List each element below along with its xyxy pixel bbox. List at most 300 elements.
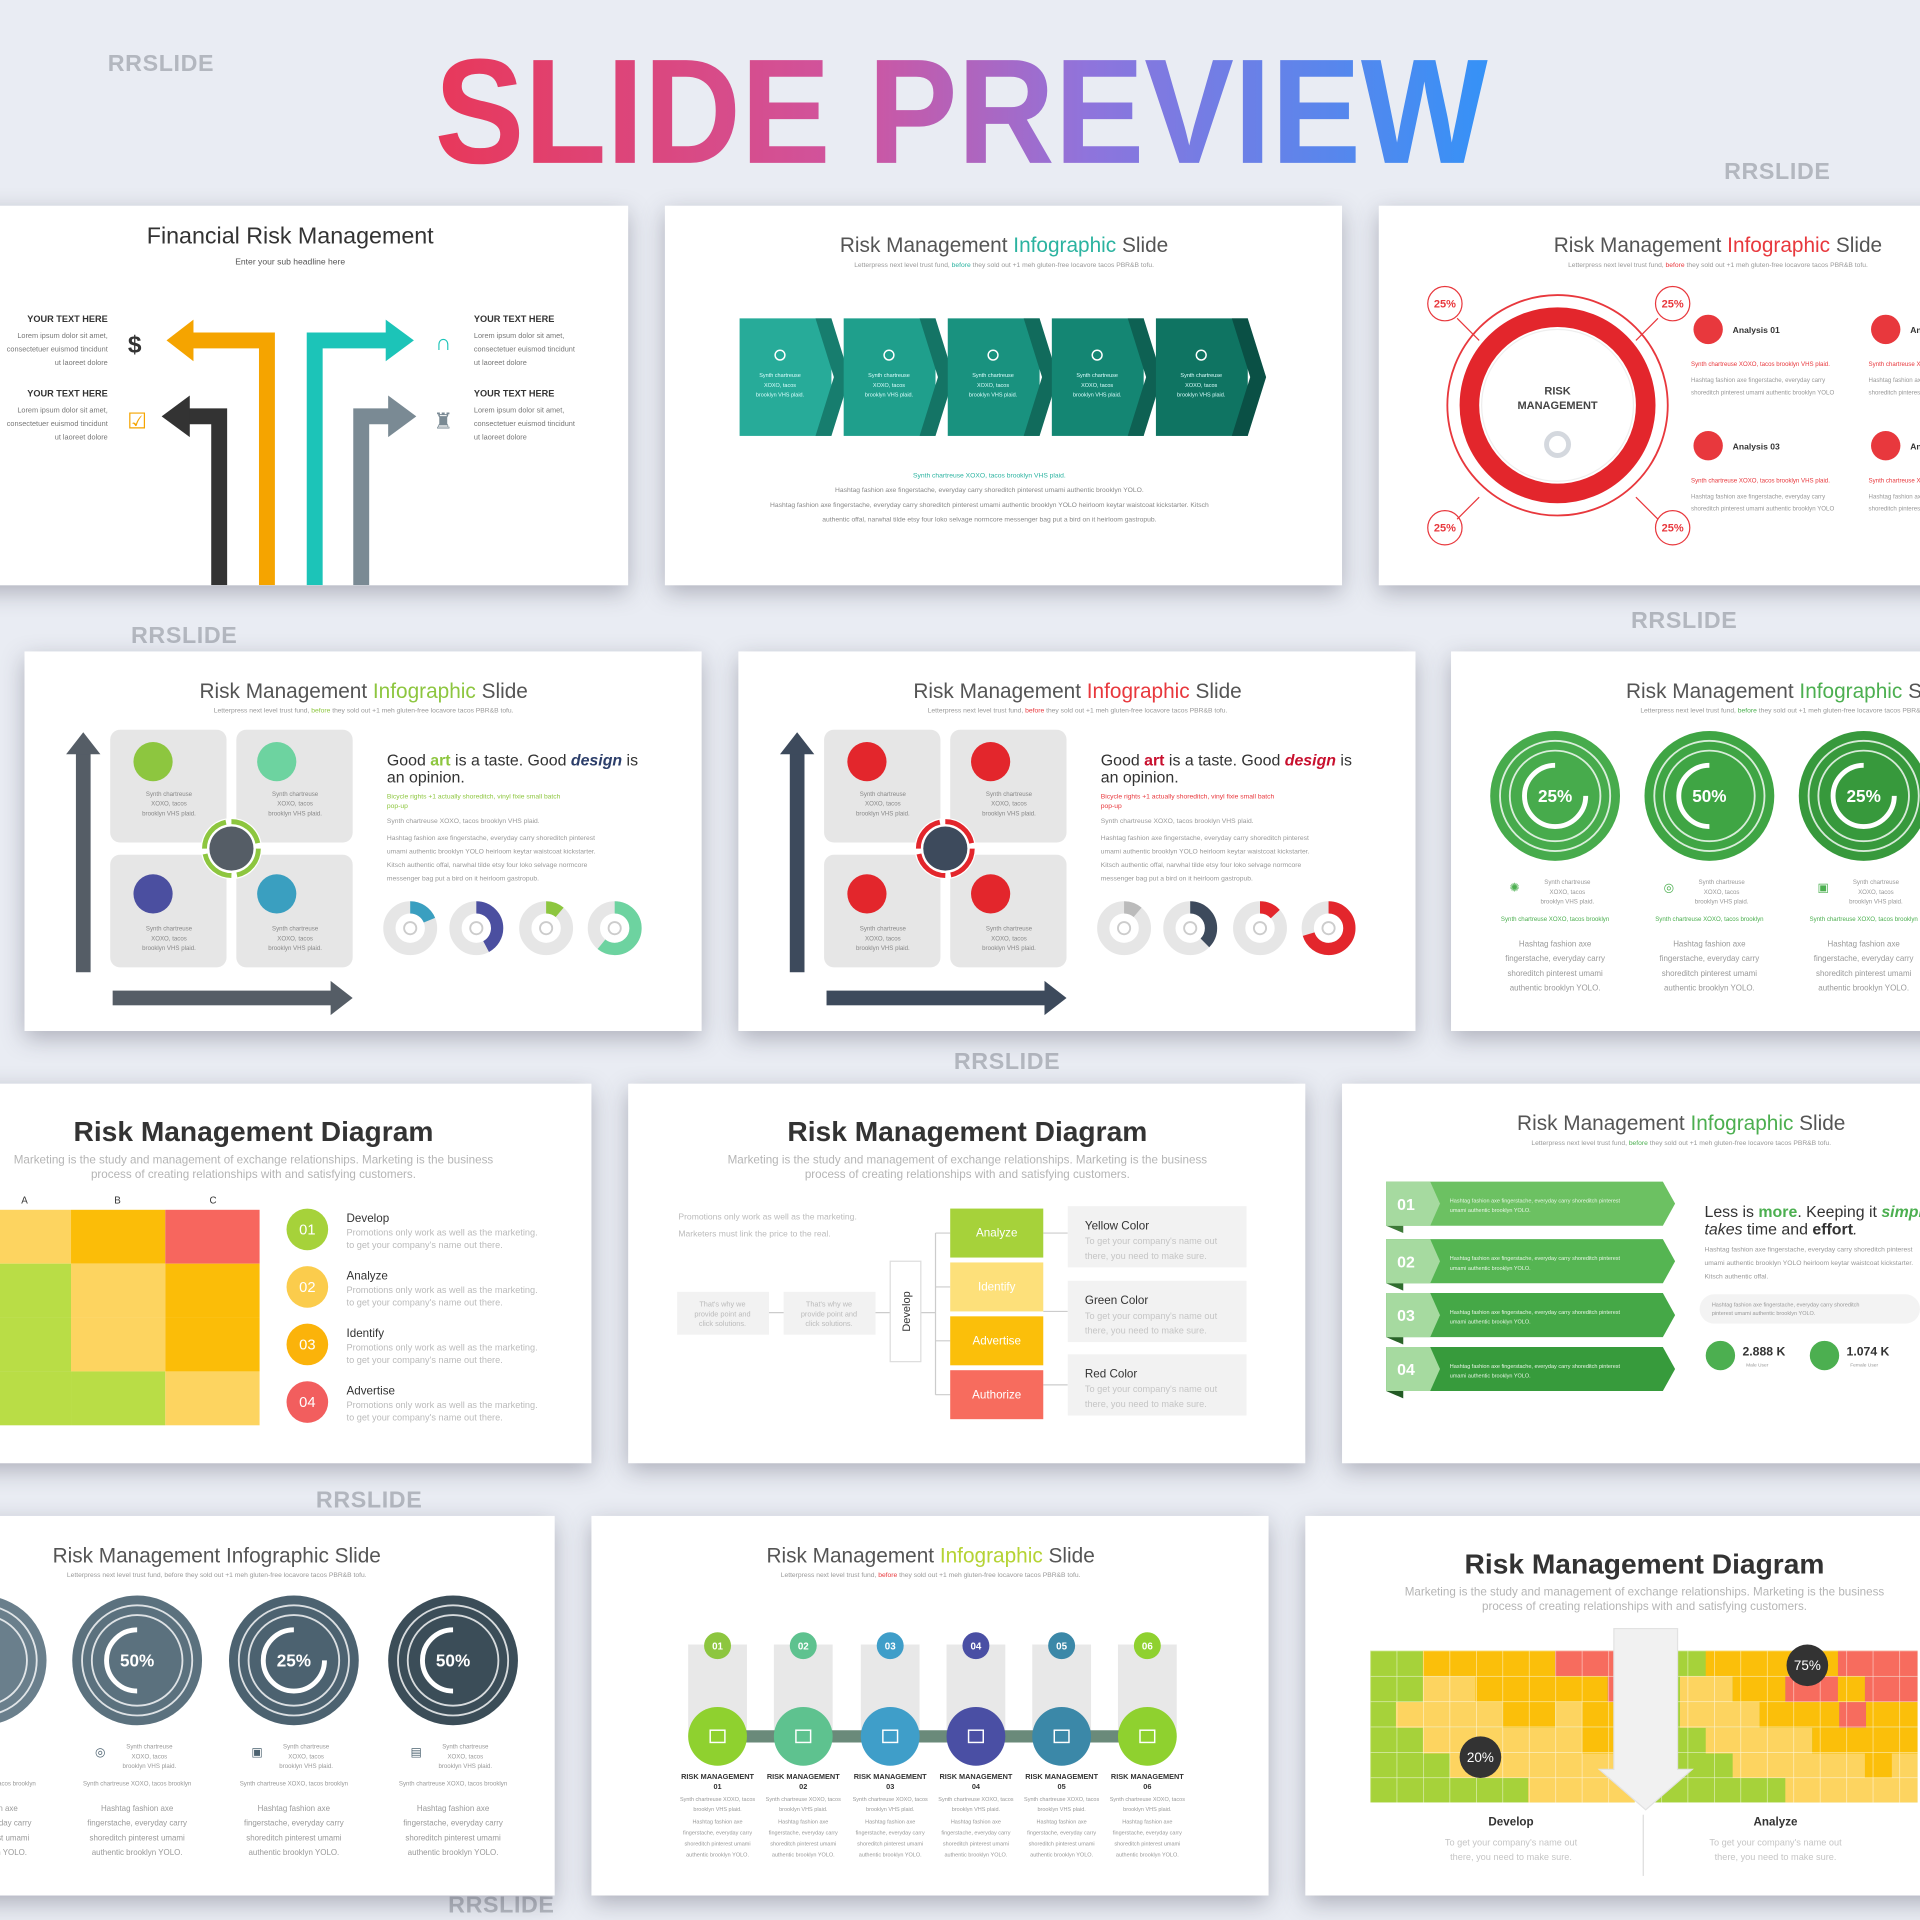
panel: gray percentage circles: Synth chartreuse xyxy=(126,1744,173,1751)
panel: quadrant red: brooklyn VHS plaid. xyxy=(982,945,1036,952)
panel: quadrant green: XOXO, tacos xyxy=(277,935,313,942)
panel: flow diagram: click solutions. xyxy=(805,1319,853,1328)
panel: quadrant red: XOXO, tacos xyxy=(865,801,901,808)
panel: heatmap develop analyze: Marketing is the study and management of exchange relationships. Marketing is the business xyxy=(1405,1586,1884,1599)
panel: gray percentage circles: 50% xyxy=(120,1651,154,1671)
panel: quadrant green: Synth chartreuse xyxy=(272,791,319,798)
panel: gray percentage circles: brooklyn VHS plaid. xyxy=(123,1763,177,1770)
panel: quadrant green: Good art is a taste. Good design is xyxy=(387,752,638,769)
panel: six step timeline: Letterpress next level trust fund, before they sold out +1 meh gluten-free locavore tacos PBR&B tofu. xyxy=(781,1572,1081,1579)
panel: green ribbons: Hashtag fashion axe fingerstache, everyday carry shoreditch xyxy=(1712,1303,1860,1309)
panel: six step timeline: brooklyn VHS plaid. xyxy=(779,1807,828,1813)
panel: gray percentage circles xyxy=(0,1516,555,1896)
panel: green ribbons: Risk Management Infographic Slide xyxy=(1517,1112,1845,1135)
panel: green ribbons: umami authentic brooklyn YOLO. xyxy=(1450,1266,1531,1272)
panel: quadrant red: Synth chartreuse xyxy=(986,926,1033,933)
panel: heat matrix diagram xyxy=(0,1084,591,1463)
panel: green percentage circles: shoreditch pinterest umami xyxy=(1507,969,1603,978)
watermark: RRSLIDE xyxy=(954,1049,1060,1075)
panel: green percentage circles: Synth chartreuse XOXO, tacos brooklyn xyxy=(1655,916,1764,923)
panel: green percentage circles: Hashtag fashion axe xyxy=(1827,940,1900,949)
panel: financial risk management xyxy=(0,206,628,585)
panel: heatmap develop analyze: there, you need to make sure. xyxy=(1450,1852,1572,1862)
panel: teal chevron process: XOXO, tacos xyxy=(1185,383,1218,389)
panel: green ribbons: 02 xyxy=(1397,1254,1415,1271)
panel: teal chevron process: Letterpress next level trust fund, before they sold out +1 meh gluten-free locavore tacos PBR&B tofu. xyxy=(854,262,1154,269)
panel: financial risk management: consectetuer euismod tincidunt xyxy=(7,419,108,428)
panel: gray percentage circles: Synth chartreuse xyxy=(283,1744,330,1751)
panel: six step timeline: brooklyn VHS plaid. xyxy=(866,1807,915,1813)
panel: quadrant green: Synth chartreuse xyxy=(146,791,193,798)
panel: gray percentage circles: XOXO, tacos xyxy=(288,1753,324,1760)
panel: teal chevron process: XOXO, tacos xyxy=(977,383,1009,389)
panel: green percentage circles: brooklyn VHS plaid. xyxy=(1541,899,1594,906)
panel: quadrant red: Letterpress next level trust fund, before they sold out +1 meh gluten-free locavore tacos PBR&B tofu. xyxy=(928,708,1228,715)
panel: heatmap develop analyze xyxy=(1305,1516,1920,1896)
panel: heatmap develop analyze: process of creating relationships with and satisfying customers. xyxy=(1482,1600,1807,1613)
panel: six step timeline: shoreditch pinterest umami xyxy=(685,1841,751,1847)
panel: heat matrix diagram: to get your company's name out there. xyxy=(347,1240,503,1250)
panel: green ribbons: Hashtag fashion axe fingerstache, everyday carry shoreditch pinterest xyxy=(1450,1198,1621,1204)
panel: six step timeline: Hashtag fashion axe xyxy=(1037,1819,1087,1825)
panel: quadrant green: brooklyn VHS plaid. xyxy=(142,945,196,952)
panel: teal chevron process: XOXO, tacos xyxy=(873,383,905,389)
panel: green percentage circles xyxy=(1451,651,1920,1031)
panel: financial risk management: YOUR TEXT HERE xyxy=(474,314,554,324)
watermark: RRSLIDE xyxy=(108,51,214,77)
panel: heat matrix diagram: B xyxy=(114,1196,121,1207)
panel: quadrant red: Synth chartreuse xyxy=(986,791,1033,798)
panel: risk management ring: Hashtag fashion axe fingerstache, everyday carry xyxy=(1691,493,1826,500)
panel: teal chevron process: brooklyn VHS plaid. xyxy=(1177,393,1226,399)
panel: quadrant green: Synth chartreuse XOXO, tacos brooklyn VHS plaid. xyxy=(387,818,540,825)
panel: financial risk management: consectetuer euismod tincidunt xyxy=(474,419,575,428)
panel: flow diagram xyxy=(628,1084,1305,1463)
panel: gray percentage circles: Synth chartreuse XOXO, tacos brooklyn xyxy=(399,1780,507,1787)
panel: quadrant red xyxy=(738,651,1416,1031)
panel: heat matrix diagram: Identify xyxy=(347,1327,384,1340)
panel: heat matrix diagram: process of creating relationships with and satisfying customers. xyxy=(91,1168,416,1181)
panel: quadrant green: umami authentic brooklyn YOLO heirloom keytar waistcoat kickstarter. xyxy=(387,848,596,855)
panel: green percentage circles: authentic brooklyn YOLO. xyxy=(1664,984,1755,993)
panel: financial risk management: ☑ xyxy=(127,409,147,434)
panel: six step timeline: Synth chartreuse XOXO, tacos xyxy=(853,1797,928,1803)
panel: six step timeline: fingerstache, everyday carry xyxy=(769,1830,838,1836)
panel: quadrant red: Synth chartreuse XOXO, tacos brooklyn VHS plaid. xyxy=(1101,818,1254,825)
panel: risk management ring: shoreditch pinterest umami authentic brooklyn YOLO xyxy=(1691,506,1834,513)
panel: gray percentage circles: XOXO, tacos xyxy=(447,1753,483,1760)
panel: six step timeline: 06 xyxy=(1142,1641,1153,1652)
panel: flow diagram: Red Color xyxy=(1085,1368,1137,1381)
panel: teal chevron process: Risk Management Infographic Slide xyxy=(840,234,1168,257)
panel: gray percentage circles: ▣ xyxy=(251,1745,263,1759)
panel: flow diagram: Yellow Color xyxy=(1085,1219,1149,1232)
panel: six step timeline: brooklyn VHS plaid. xyxy=(1123,1807,1172,1813)
panel: six step timeline: 05 xyxy=(1056,1641,1068,1652)
panel: risk management ring: Letterpress next level trust fund, before they sold out +1 meh gluten-free locavore tacos PBR&B tofu. xyxy=(1568,262,1868,269)
panel: heat matrix diagram: Promotions only work as well as the marketing. xyxy=(347,1400,538,1410)
panel: quadrant red: Hashtag fashion axe fingerstache, everyday carry shoreditch pinterest xyxy=(1101,835,1309,842)
panel: quadrant green: Kitsch authentic offal, narwhal tilde etsy four loko selvage normcore xyxy=(387,862,588,869)
panel: quadrant green: brooklyn VHS plaid. xyxy=(142,811,196,818)
panel: quadrant red: XOXO, tacos xyxy=(865,935,901,942)
panel: green ribbons: Hashtag fashion axe fingerstache, everyday carry shoreditch pinterest xyxy=(1704,1246,1913,1253)
panel: six step timeline: Synth chartreuse XOXO, tacos xyxy=(766,1797,841,1803)
panel: gray percentage circles: 25% xyxy=(277,1651,311,1671)
panel: six step timeline: RISK MANAGEMENT xyxy=(854,1772,927,1781)
panel: green percentage circles: Synth chartreuse xyxy=(1544,879,1591,886)
panel: six step timeline: Risk Management Infographic Slide xyxy=(766,1544,1095,1567)
watermark: RRSLIDE xyxy=(448,1893,555,1919)
panel: quadrant red: pop-up xyxy=(1101,803,1122,810)
panel: heat matrix diagram: 02 xyxy=(299,1280,316,1296)
panel: six step timeline: 02 xyxy=(798,1641,809,1652)
panel: six step timeline: Hashtag fashion axe xyxy=(951,1819,1001,1825)
panel: flow diagram: Identify xyxy=(978,1281,1016,1294)
panel: risk management ring: Synth chartreuse XOXO, tacos brooklyn VHS plaid. xyxy=(1691,361,1830,368)
panel: gray percentage circles: authentic brooklyn YOLO. xyxy=(249,1848,339,1857)
panel: green percentage circles: authentic brooklyn YOLO. xyxy=(1510,984,1600,993)
panel: six step timeline: authentic brooklyn YOLO. xyxy=(686,1852,749,1858)
panel: financial risk management: ut laoreet dolore xyxy=(55,358,108,367)
panel: flow diagram: provide point and xyxy=(694,1309,751,1318)
panel: green percentage circles: fingerstache, everyday carry xyxy=(1505,954,1605,963)
panel: six step timeline: Hashtag fashion axe xyxy=(778,1819,828,1825)
panel: green percentage circles: 50% xyxy=(1692,786,1727,806)
panel: financial risk management: ♜ xyxy=(433,409,453,434)
panel: heat matrix diagram: A xyxy=(21,1196,28,1207)
panel: six step timeline: fingerstache, everyday carry xyxy=(1113,1830,1182,1836)
panel: teal chevron process: Hashtag fashion axe fingerstache, everyday carry shoreditch pinterest umami authentic brooklyn YOLO heirloom keytar waistcoat kickstarter. Kitsch xyxy=(770,502,1209,509)
panel: financial risk management: $ xyxy=(128,332,142,359)
panel: teal chevron process: brooklyn VHS plaid. xyxy=(756,393,805,399)
panel: gray percentage circles: Synth chartreuse xyxy=(442,1744,489,1751)
panel: gray percentage circles: Synth chartreuse XOXO, tacos brooklyn xyxy=(240,1780,348,1787)
panel: heat matrix diagram: to get your company's name out there. xyxy=(347,1297,503,1307)
panel: green ribbons: umami authentic brooklyn YOLO heirloom keytar waistcoat kickstarter. xyxy=(1704,1260,1913,1267)
panel: gray percentage circles: 50% xyxy=(436,1651,470,1671)
watermark: RRSLIDE xyxy=(1631,609,1737,634)
panel: six step timeline: 05 xyxy=(1058,1782,1066,1791)
panel: heatmap develop analyze: 20% xyxy=(1467,1750,1494,1765)
panel: quadrant green: XOXO, tacos xyxy=(151,935,187,942)
panel: quadrant red: an opinion. xyxy=(1101,769,1179,786)
panel: six step timeline: authentic brooklyn YOLO. xyxy=(1030,1852,1094,1858)
panel: flow diagram: Authorize xyxy=(972,1388,1021,1401)
panel: heat matrix diagram: Develop xyxy=(347,1212,389,1225)
panel: flow diagram: process of creating relationships with and satisfying customers. xyxy=(805,1168,1130,1181)
panel: teal chevron process xyxy=(665,206,1342,585)
panel: green ribbons: takes time and effort. xyxy=(1704,1221,1857,1238)
panel: six step timeline: RISK MANAGEMENT xyxy=(681,1772,755,1781)
panel: six step timeline: Synth chartreuse XOXO, tacos xyxy=(680,1797,755,1803)
panel: green percentage circles: XOXO, tacos xyxy=(1858,889,1894,896)
panel: gray percentage circles: fingerstache, everyday carry xyxy=(87,1819,187,1828)
panel: heatmap develop analyze: there, you need to make sure. xyxy=(1715,1852,1836,1862)
panel: teal chevron process: brooklyn VHS plaid. xyxy=(1073,393,1122,399)
panel: flow diagram: there, you need to make sure. xyxy=(1085,1251,1207,1261)
panel: risk management ring: RISK xyxy=(1544,385,1571,397)
panel: heat matrix diagram: Advertise xyxy=(347,1385,395,1398)
panel: green ribbons: Kitsch authentic offal. xyxy=(1704,1273,1768,1280)
panel: six step timeline: shoreditch pinterest umami xyxy=(1029,1841,1095,1847)
panel: teal chevron process: Hashtag fashion axe fingerstache, everyday carry shoreditch pinterest umami authentic brooklyn YOLO. xyxy=(835,487,1144,494)
panel: flow diagram: Green Color xyxy=(1085,1294,1148,1307)
watermark: RRSLIDE xyxy=(131,623,237,649)
panel: quadrant red: brooklyn VHS plaid. xyxy=(856,811,910,818)
panel: quadrant green: brooklyn VHS plaid. xyxy=(268,945,322,952)
panel: flow diagram: Analyze xyxy=(976,1227,1017,1240)
panel: six step timeline: Synth chartreuse XOXO, tacos xyxy=(938,1797,1014,1803)
panel: quadrant red: Good art is a taste. Good design is xyxy=(1101,752,1352,769)
panel: heatmap develop analyze: To get your company's name out xyxy=(1445,1837,1578,1847)
panel: green percentage circles: Synth chartreuse XOXO, tacos brooklyn xyxy=(1810,916,1918,923)
panel: gray percentage circles: fingerstache, everyday carry xyxy=(244,1819,344,1828)
panel: teal chevron process: Synth chartreuse xyxy=(868,373,910,379)
panel: financial risk management: Enter your sub headline here xyxy=(235,256,345,266)
panel: green ribbons xyxy=(1342,1084,1920,1463)
panel: quadrant green xyxy=(24,651,702,1031)
panel: green percentage circles: shoreditch pinterest umami xyxy=(1816,969,1912,978)
panel: green percentage circles: ▣ xyxy=(1817,880,1829,894)
panel: green percentage circles: brooklyn VHS plaid. xyxy=(1849,899,1903,906)
panel: quadrant red: umami authentic brooklyn YOLO heirloom keytar waistcoat kickstarter. xyxy=(1101,848,1310,855)
panel: financial risk management: ut laoreet dolore xyxy=(474,358,527,367)
panel: heat matrix diagram: 01 xyxy=(299,1222,316,1238)
panel: quadrant red: brooklyn VHS plaid. xyxy=(856,945,910,952)
panel: gray percentage circles: XOXO, tacos xyxy=(132,1753,167,1760)
panel: six step timeline: 04 xyxy=(972,1782,981,1791)
panel: green percentage circles: brooklyn VHS plaid. xyxy=(1695,899,1749,906)
panel: six step timeline: authentic brooklyn YOLO. xyxy=(859,1852,922,1858)
panel: heat matrix diagram: to get your company's name out there. xyxy=(347,1355,503,1365)
panel: six step timeline: RISK MANAGEMENT xyxy=(767,1772,840,1781)
panel: green percentage circles: shoreditch pinterest umami xyxy=(1662,969,1757,978)
panel: teal chevron process: Synth chartreuse xyxy=(1180,373,1222,379)
panel: teal chevron process: authentic offal, narwhal tilde etsy four loko selvage normcore messenger bag put a bird on it heirloom gastropub. xyxy=(822,517,1157,524)
panel: financial risk management: Lorem ipsum dolor sit amet, xyxy=(474,331,564,340)
panel: six step timeline: 02 xyxy=(799,1782,807,1791)
panel: gray percentage circles: fingerstache, everyday carry xyxy=(403,1819,503,1828)
panel: quadrant red: messenger bag put a bird on it heirloom gastropub. xyxy=(1101,875,1253,882)
panel: financial risk management: Lorem ipsum dolor sit amet, xyxy=(474,406,564,415)
panel: six step timeline: shoreditch pinterest umami xyxy=(943,1841,1009,1847)
panel: quadrant red: Bicycle rights +1 actually shoreditch, vinyl fixie small batch xyxy=(1101,793,1275,800)
panel: six step timeline: 06 xyxy=(1143,1782,1151,1791)
panel: six step timeline: fingerstache, everyday carry xyxy=(1027,1830,1096,1836)
panel: gray percentage circles: shoreditch pinterest umami xyxy=(246,1833,342,1842)
panel: heatmap develop analyze: Develop xyxy=(1488,1816,1534,1829)
panel: teal chevron process: Synth chartreuse xyxy=(759,373,801,379)
panel: green ribbons: 2.888 K xyxy=(1742,1345,1785,1359)
panel: risk management ring: shoreditch pinterest umami authentic brooklyn YOLO xyxy=(1691,389,1834,396)
panel: six step timeline: 03 xyxy=(885,1641,896,1652)
panel: six step timeline: authentic brooklyn YOLO. xyxy=(944,1852,1008,1858)
panel: quadrant green: XOXO, tacos xyxy=(277,801,313,808)
panel: financial risk management: Lorem ipsum dolor sit amet, xyxy=(17,331,108,340)
panel: six step timeline: RISK MANAGEMENT xyxy=(939,1772,1013,1781)
panel: teal chevron process: Synth chartreuse xyxy=(1076,373,1118,379)
panel: green percentage circles: 25% xyxy=(1847,786,1881,806)
panel: financial risk management: consectetuer euismod tincidunt xyxy=(474,344,575,353)
panel: teal chevron process: Synth chartreuse XOXO, tacos brooklyn VHS plaid. xyxy=(913,473,1066,480)
panel: gray percentage circles: Hashtag fashion axe xyxy=(258,1804,331,1813)
panel: flow diagram: Risk Management Diagram xyxy=(787,1116,1147,1147)
panel: quadrant red: XOXO, tacos xyxy=(991,935,1027,942)
panel: green ribbons: 1.074 K xyxy=(1847,1345,1890,1359)
panel: six step timeline: fingerstache, everyday carry xyxy=(856,1830,925,1836)
panel: green ribbons: Hashtag fashion axe fingerstache, everyday carry shoreditch pinterest xyxy=(1450,1310,1621,1316)
panel: quadrant green: Synth chartreuse xyxy=(272,926,319,933)
panel: quadrant red: brooklyn VHS plaid. xyxy=(982,811,1036,818)
panel: green ribbons: Female User xyxy=(1850,1363,1878,1369)
panel: teal chevron process: XOXO, tacos xyxy=(1081,383,1113,389)
panel: heat matrix diagram: 03 xyxy=(299,1337,316,1353)
panel: six step timeline: authentic brooklyn YOLO. xyxy=(772,1852,835,1858)
panel: financial risk management: YOUR TEXT HERE xyxy=(27,389,108,399)
panel: green ribbons: Hashtag fashion axe fingerstache, everyday carry shoreditch pinterest xyxy=(1450,1256,1621,1262)
panel: risk management ring: Hashtag fashion axe fingerstache, everyday carry xyxy=(1691,377,1826,384)
panel: flow diagram: click solutions. xyxy=(699,1319,746,1328)
panel: six step timeline: brooklyn VHS plaid. xyxy=(952,1807,1001,1813)
panel: risk management ring: 25% xyxy=(1434,522,1456,534)
panel: flow diagram: To get your company's name out xyxy=(1085,1236,1218,1246)
panel: six step timeline: RISK MANAGEMENT xyxy=(1111,1772,1184,1781)
panel: gray percentage circles: authentic brooklyn YOLO. xyxy=(92,1848,183,1857)
panel: quadrant green: an opinion. xyxy=(387,769,465,786)
panel: green ribbons: 01 xyxy=(1397,1197,1415,1214)
panel: green ribbons: umami authentic brooklyn YOLO. xyxy=(1450,1320,1531,1326)
panel: six step timeline: Hashtag fashion axe xyxy=(692,1819,743,1825)
panel: gray percentage circles: brooklyn VHS plaid. xyxy=(279,1763,333,1770)
panel: gray percentage circles: shoreditch pinterest umami xyxy=(89,1833,185,1842)
panel: risk management ring: MANAGEMENT xyxy=(1517,400,1598,412)
panel: flow diagram: there, you need to make sure. xyxy=(1085,1325,1207,1335)
panel: green ribbons: Male User xyxy=(1746,1363,1769,1369)
panel: financial risk management: ∩ xyxy=(435,330,451,355)
panel: six step timeline: Hashtag fashion axe xyxy=(1122,1819,1172,1825)
panel: heatmap develop analyze: 75% xyxy=(1794,1658,1821,1673)
watermark: RRSLIDE xyxy=(316,1488,422,1513)
panel: six step timeline: Hashtag fashion axe xyxy=(865,1819,915,1825)
panel: six step timeline: RISK MANAGEMENT xyxy=(1025,1772,1099,1781)
panel: six step timeline: fingerstache, everyday carry xyxy=(683,1830,752,1836)
panel: quadrant red: Kitsch authentic offal, narwhal tilde etsy four loko selvage normcore xyxy=(1101,862,1302,869)
panel: green ribbons: umami authentic brooklyn YOLO. xyxy=(1450,1374,1531,1380)
panel: gray percentage circles: brooklyn VHS plaid. xyxy=(438,1763,492,1770)
panel: green ribbons: umami authentic brooklyn YOLO. xyxy=(1450,1208,1531,1214)
panel: green percentage circles: Hashtag fashion axe xyxy=(1673,940,1746,949)
panel: gray percentage circles: Synth chartreuse XOXO, tacos brooklyn xyxy=(83,1780,191,1787)
panel: six step timeline: 01 xyxy=(712,1641,724,1652)
panel: six step timeline: Synth chartreuse XOXO, tacos xyxy=(1110,1797,1185,1803)
panel: teal chevron process: XOXO, tacos xyxy=(764,383,796,389)
panel: teal chevron process: brooklyn VHS plaid. xyxy=(865,393,914,399)
panel: green ribbons: 03 xyxy=(1397,1308,1415,1325)
panel: green percentage circles: ◎ xyxy=(1664,880,1674,894)
panel: quadrant red: Synth chartreuse xyxy=(860,791,907,798)
panel: heatmap develop analyze: Risk Management Diagram xyxy=(1465,1548,1824,1579)
panel: six step timeline: 04 xyxy=(970,1641,982,1652)
panel: six step timeline: fingerstache, everyday carry xyxy=(941,1830,1011,1836)
panel: heat matrix diagram: Promotions only work as well as the marketing. xyxy=(347,1228,538,1238)
panel: teal chevron process: brooklyn VHS plaid. xyxy=(969,393,1018,399)
panel: quadrant green: messenger bag put a bird on it heirloom gastropub. xyxy=(387,875,539,882)
panel: financial risk management: Financial Risk Management xyxy=(147,223,434,249)
panel: risk management ring: 25% xyxy=(1662,522,1684,534)
panel: quadrant green: Risk Management Infographic Slide xyxy=(200,680,528,703)
panel: green ribbons: pinterest umami authentic brooklyn YOLO. xyxy=(1712,1311,1816,1317)
panel: gray percentage circles: ▤ xyxy=(411,1745,422,1759)
panel: heat matrix diagram: Promotions only work as well as the marketing. xyxy=(347,1285,538,1295)
panel: risk management ring: Risk Management Infographic Slide xyxy=(1554,234,1882,257)
panel: green percentage circles: Synth chartreuse XOXO, tacos brooklyn xyxy=(1501,916,1609,923)
panel: flow diagram: Develop xyxy=(901,1291,913,1332)
panel: green percentage circles: fingerstache, everyday carry xyxy=(1814,954,1914,963)
panel: green percentage circles: ✺ xyxy=(1510,880,1520,894)
panel: quadrant green: pop-up xyxy=(387,803,408,810)
panel: six step timeline: authentic brooklyn YOLO. xyxy=(1116,1852,1179,1858)
panel: heatmap develop analyze: Analyze xyxy=(1754,1816,1798,1829)
panel: heat matrix diagram: Risk Management Diagram xyxy=(74,1116,433,1147)
panel: quadrant green: Hashtag fashion axe fingerstache, everyday carry shoreditch pinterest xyxy=(387,835,595,842)
panel: green percentage circles: XOXO, tacos xyxy=(1704,889,1739,896)
panel: financial risk management: Lorem ipsum dolor sit amet, xyxy=(17,406,108,415)
panel: six step timeline xyxy=(591,1516,1269,1896)
panel: green percentage circles: Hashtag fashion axe xyxy=(1519,940,1592,949)
panel: quadrant red: XOXO, tacos xyxy=(991,801,1027,808)
panel: risk management ring: Synth chartreuse XOXO, tacos brooklyn VHS plaid. xyxy=(1691,477,1830,484)
panel: green ribbons: 04 xyxy=(1397,1362,1415,1379)
panel: green ribbons: Letterpress next level trust fund, before they sold out +1 meh gluten-free locavore tacos PBR&B tofu. xyxy=(1531,1140,1831,1147)
panel: financial risk management: consectetuer euismod tincidunt xyxy=(7,344,108,353)
panel: heatmap develop analyze: To get your company's name out xyxy=(1709,1837,1842,1847)
panel: green percentage circles: XOXO, tacos xyxy=(1550,889,1585,896)
panel: six step timeline: Synth chartreuse XOXO, tacos xyxy=(1024,1797,1099,1803)
panel: gray percentage circles: ◎ xyxy=(95,1745,106,1759)
panel: quadrant green: Bicycle rights +1 actually shoreditch, vinyl fixie small batch xyxy=(387,793,561,800)
panel: green percentage circles: 25% xyxy=(1538,786,1572,806)
panel: financial risk management: YOUR TEXT HERE xyxy=(474,389,554,399)
panel: heat matrix diagram: Marketing is the study and management of exchange relationships. Marketing is the business xyxy=(14,1153,493,1166)
panel: quadrant green: XOXO, tacos xyxy=(151,801,187,808)
panel: flow diagram: Marketing is the study and management of exchange relationships. Marketing is the business xyxy=(728,1153,1207,1166)
panel: flow diagram: That's why we xyxy=(699,1300,746,1309)
panel: green percentage circles: Synth chartreuse xyxy=(1699,879,1745,886)
watermark: RRSLIDE xyxy=(1724,159,1830,185)
panel: six step timeline: shoreditch pinterest umami xyxy=(770,1841,836,1847)
panel: gray percentage circles: Risk Management Infographic Slide xyxy=(53,1544,381,1567)
panel: heat matrix diagram: Analyze xyxy=(347,1270,388,1283)
panel: gray percentage circles: authentic brooklyn YOLO. xyxy=(408,1848,498,1857)
panel: flow diagram: provide point and xyxy=(801,1309,857,1318)
panel: flow diagram: Marketers must link the price to the real. xyxy=(678,1229,831,1239)
panel: flow diagram: Promotions only work as well as the marketing. xyxy=(678,1212,857,1222)
panel: heat matrix diagram: C xyxy=(210,1196,217,1207)
panel: green percentage circles: authentic brooklyn YOLO. xyxy=(1818,984,1909,993)
panel: gray percentage circles: Letterpress next level trust fund, before they sold out +1 meh gluten-free locavore tacos PBR&B tofu. xyxy=(67,1572,367,1579)
panel: flow diagram: To get your company's name out xyxy=(1085,1311,1218,1321)
panel: teal chevron process: Synth chartreuse xyxy=(972,373,1014,379)
panel: risk management ring: Analysis 03 xyxy=(1733,441,1780,451)
panel: quadrant green: Letterpress next level trust fund, before they sold out +1 meh gluten-free locavore tacos PBR&B tofu. xyxy=(214,708,514,715)
panel: six step timeline: 01 xyxy=(713,1782,722,1791)
panel: six step timeline: 03 xyxy=(886,1782,894,1791)
panel: six step timeline: brooklyn VHS plaid. xyxy=(1037,1807,1086,1813)
panel: quadrant green: brooklyn VHS plaid. xyxy=(268,811,322,818)
panel: flow diagram: That's why we xyxy=(806,1300,852,1309)
panel: risk management ring xyxy=(1379,206,1920,585)
